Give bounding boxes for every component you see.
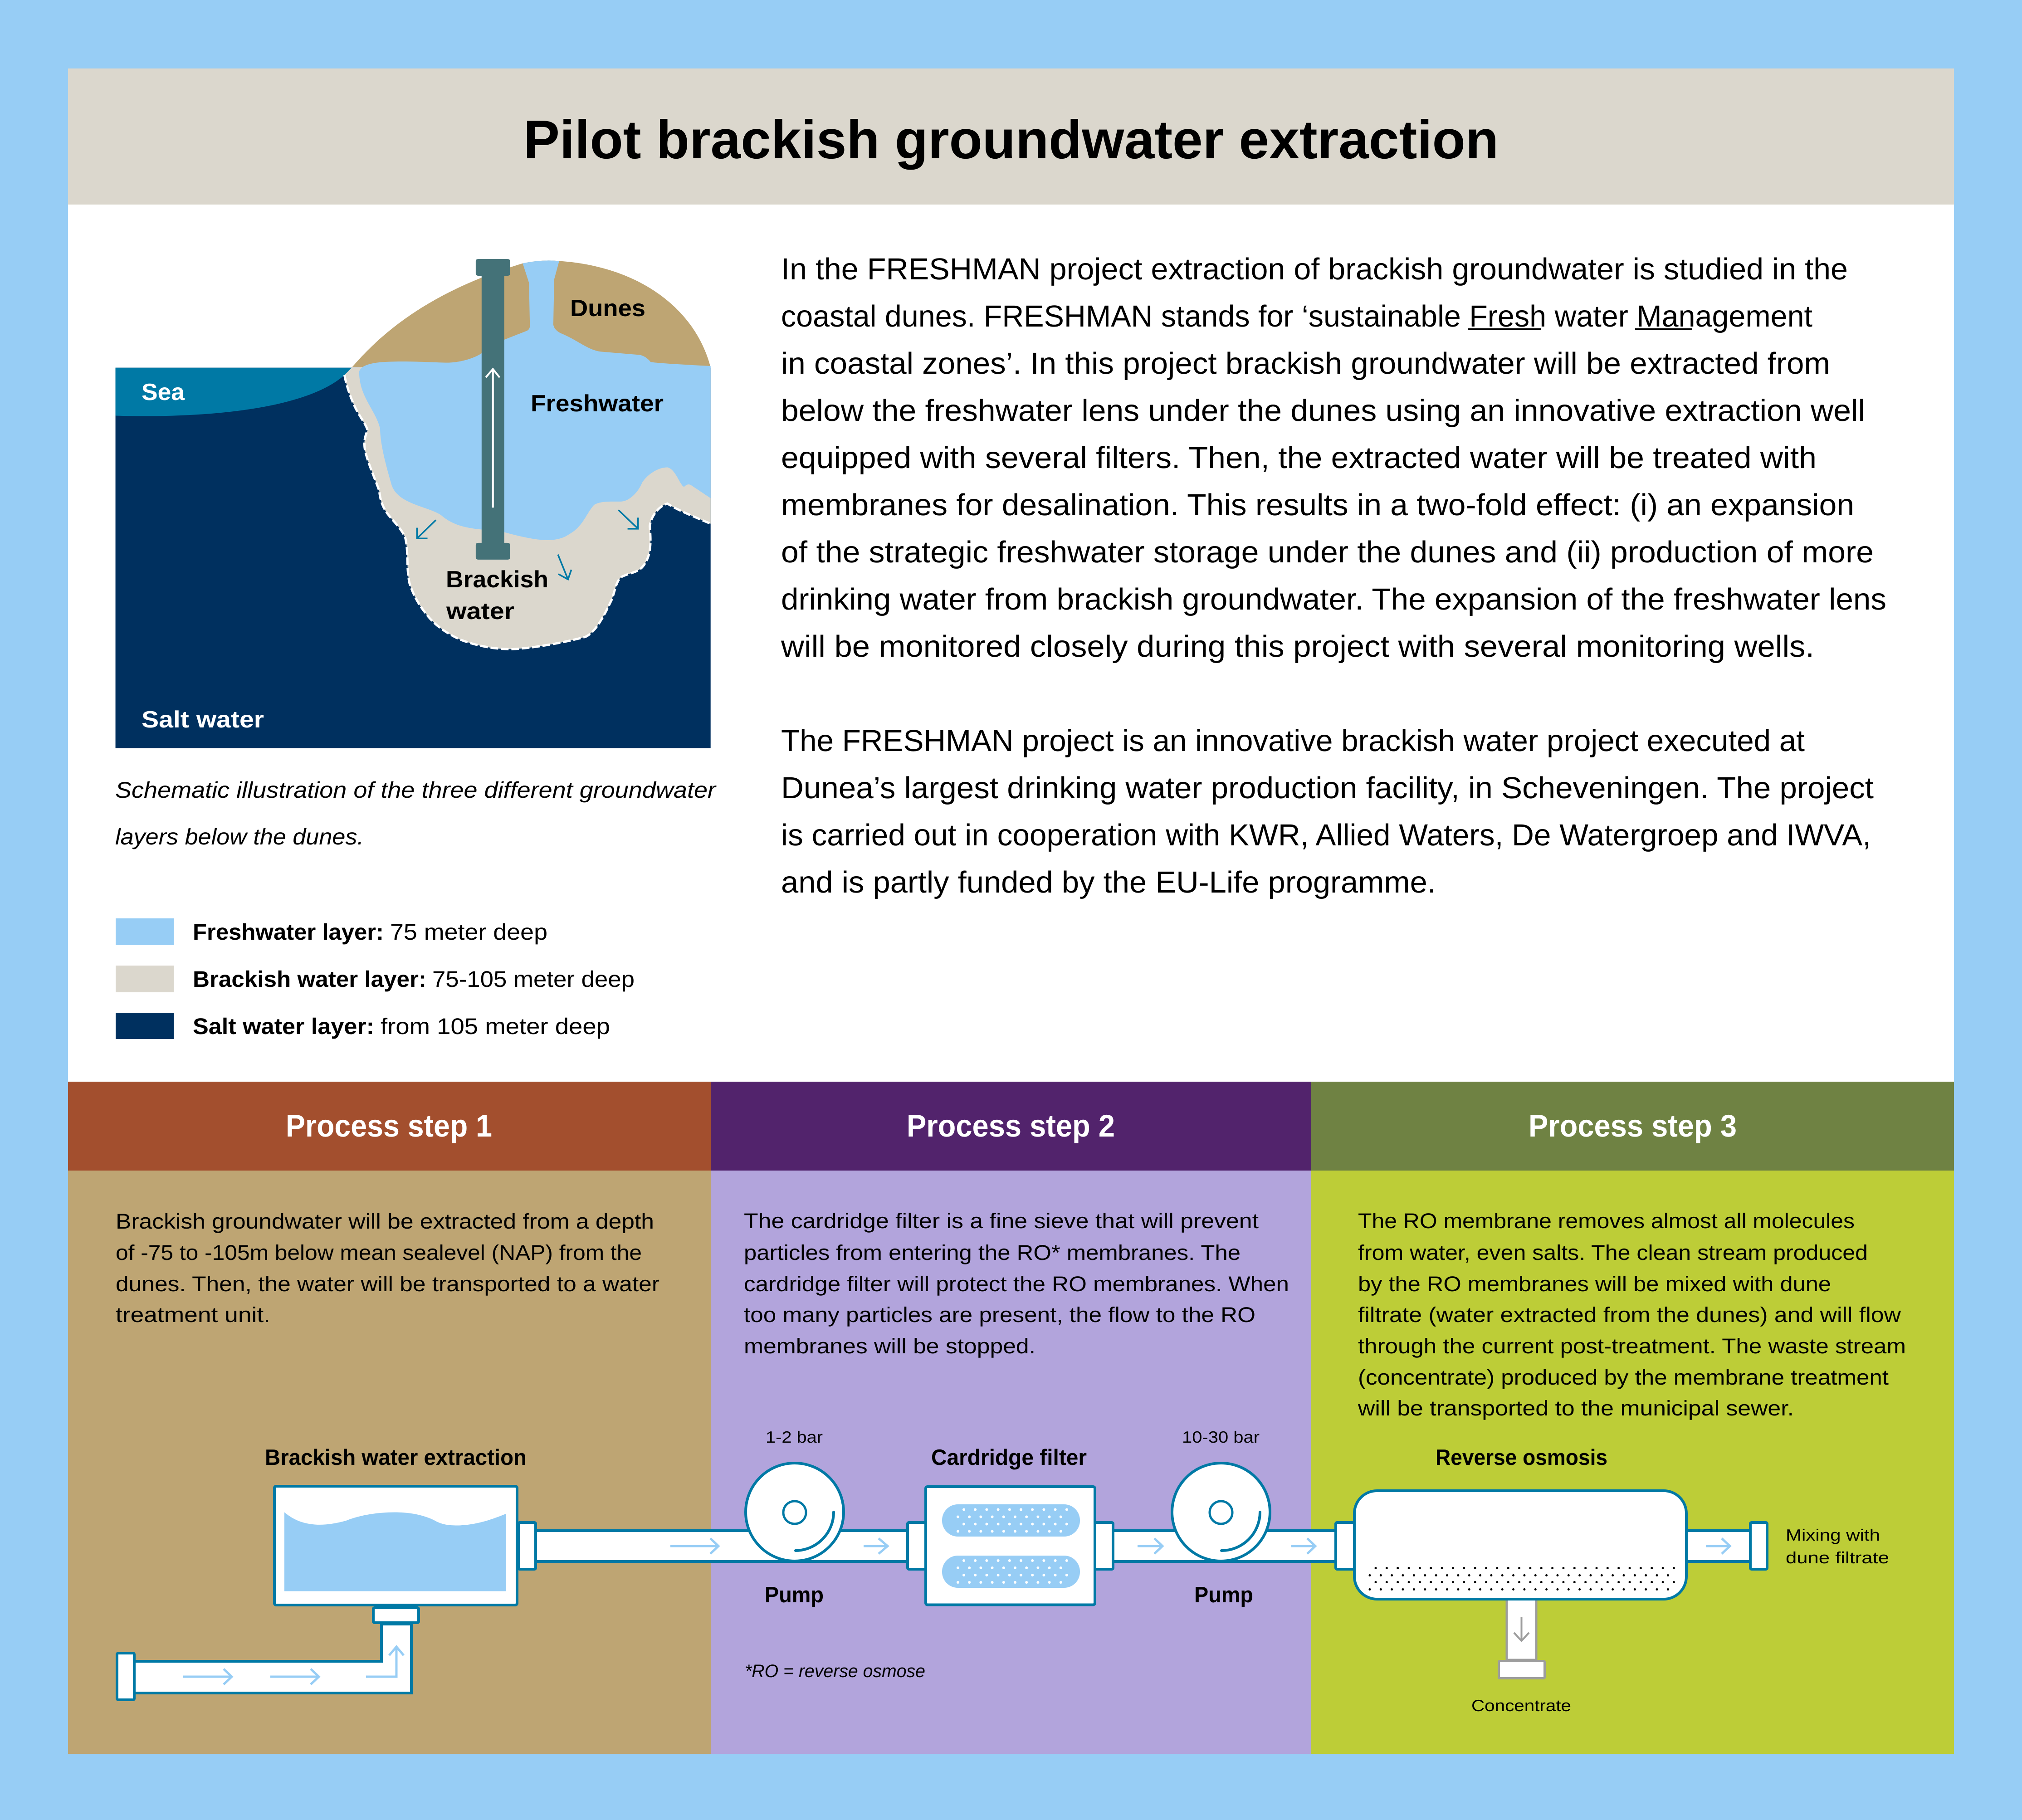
label: Salt water: Salt water — [142, 707, 264, 733]
text: process step 2 — [744, 1209, 1289, 1358]
label: Brackish water: Brackish — [446, 566, 548, 593]
arrow: well upward flow — [486, 369, 500, 507]
label: pump: Pump — [765, 1583, 824, 1607]
label: mixing with dune filtrate: dune filtrate — [1786, 1548, 1889, 1567]
label: mixing with dune filtrate — [1786, 1526, 1889, 1567]
label: Freshwater: Freshwater — [531, 390, 664, 417]
intro paragraph: of the strategic freshwater storage under the dunes and (ii) production of more — [781, 535, 1874, 569]
intro paragraph: membranes for desalination. This results in a two-fold effect: (i) an expansion — [781, 488, 1854, 522]
diagram: groundwater layers under the dunes — [116, 259, 711, 748]
text: process step 1: treatment unit. — [116, 1303, 270, 1327]
label: concentrate: Concentrate — [1471, 1696, 1571, 1715]
pressure 1-2 bar: 1-2 bar — [766, 1428, 823, 1446]
unit: reverse osmosis — [1336, 1445, 1889, 1715]
freshwater — [359, 260, 711, 540]
label: Brackish water — [446, 566, 548, 625]
legend item: salt water — [116, 1013, 610, 1039]
dunes — [352, 260, 711, 368]
text: process step 2: cardridge filter will protect the RO membranes. When — [744, 1272, 1289, 1296]
arrow: pipe to filter — [864, 1538, 888, 1554]
arrow: flow left — [417, 520, 436, 538]
vessel — [1354, 1491, 1686, 1599]
pump swoosh — [1221, 1512, 1260, 1551]
heading: process step 3: Process step 3 — [1529, 1108, 1737, 1143]
text: process step 1: dunes. Then, the water will be transported to a water — [116, 1272, 659, 1296]
label: Sea: Sea — [142, 379, 185, 405]
label: mixing with dune filtrate: Mixing with — [1786, 1526, 1880, 1544]
panel: process step 1 — [68, 1082, 711, 1754]
unit: pump 2 — [1172, 1428, 1270, 1607]
project paragraph: and is partly funded by the EU-Life programme. — [781, 865, 1436, 899]
brackish water layer — [344, 368, 711, 649]
footnote: RO: *RO = reverse osmose — [745, 1661, 925, 1681]
arrow: outlet — [1706, 1538, 1730, 1554]
intro paragraph — [781, 252, 1886, 664]
tank — [274, 1486, 517, 1605]
filter housing — [926, 1487, 1095, 1605]
arrow: filter to pump — [1138, 1538, 1162, 1554]
label: pump: Pump — [1194, 1583, 1253, 1607]
unit: brackish water extraction — [117, 1445, 718, 1700]
legend item: brackish water: Brackish water layer: — [193, 966, 426, 992]
arrow: flow down — [558, 555, 571, 580]
intro paragraph: equipped with several filters. Then, the extracted water will be treated with — [781, 441, 1817, 475]
pump rotor — [783, 1501, 806, 1524]
text: process step 1: Brackish groundwater will be extracted from a depth — [116, 1209, 654, 1233]
concentrate pipe — [1507, 1596, 1536, 1660]
dashed boundary brackish and salt — [344, 375, 711, 649]
arrow: inlet riser — [366, 1647, 404, 1677]
label: Dunes: Dunes — [570, 295, 645, 322]
intro paragraph: in coastal zones’. In this project brackish groundwater will be extracted from — [781, 346, 1830, 381]
text: process step 3: The RO membrane removes almost all molecules — [1358, 1209, 1855, 1233]
intro paragraph: will be monitored closely during this project with several monitoring wells. — [781, 629, 1814, 664]
legend — [116, 918, 635, 1039]
text: process step 3: by the RO membranes will be mixed with dune — [1358, 1272, 1831, 1296]
sea — [116, 368, 352, 416]
legend item: brackish water — [116, 966, 635, 992]
legend item: salt water: Salt water layer: — [193, 1014, 374, 1039]
text: process step 3: through the current post-treatment. The waste stream — [1358, 1334, 1906, 1358]
text: process step 3 — [1358, 1209, 1906, 1420]
label: Brackish water: water — [446, 598, 514, 625]
text: process step 2: membranes will be stopped. — [744, 1334, 1035, 1358]
text: process step 1: of -75 to -105m below mean sealevel (NAP) from the — [116, 1240, 642, 1264]
inlet flange — [1336, 1522, 1355, 1569]
pump swoosh — [796, 1512, 834, 1551]
pump body — [1172, 1463, 1270, 1561]
arrow: pump to reverse osmosis — [1291, 1538, 1315, 1554]
intro paragraph: below the freshwater lens under the dunes using an innovative extraction well — [781, 394, 1865, 428]
membrane dots — [1370, 1568, 1676, 1589]
caption — [115, 777, 717, 849]
arrow: outlet — [670, 1538, 718, 1554]
intro paragraph: In the FRESHMAN project extraction of brackish groundwater is studied in the — [781, 252, 1848, 286]
outlet flange — [1750, 1522, 1767, 1569]
title band — [68, 68, 1954, 205]
text: process step 3: from water, even salts. The clean stream produced — [1358, 1240, 1868, 1264]
caption: Schematic illustration of the three different groundwater — [115, 777, 717, 803]
inlet flange — [117, 1653, 134, 1700]
project paragraph — [781, 724, 1874, 899]
arrow: inlet 1 — [183, 1669, 232, 1684]
pump body — [746, 1463, 844, 1561]
legend item: freshwater: 75 meter deep — [390, 919, 547, 945]
pressure 10-30 bar: 10-30 bar — [1182, 1428, 1260, 1446]
left flange — [908, 1522, 926, 1569]
label: cardridge filter: Cardridge filter — [931, 1445, 1087, 1470]
text: process step 2: The cardridge filter is a fine sieve that will prevent — [744, 1209, 1259, 1233]
water in tank — [284, 1512, 506, 1591]
panel: process step 2 — [711, 1082, 1311, 1754]
project paragraph: The FRESHMAN project is an innovative brackish water project executed at — [781, 724, 1805, 758]
project paragraph: Dunea’s largest drinking water production facility, in Scheveningen. The project — [781, 771, 1874, 805]
pipes between process units — [537, 1531, 1749, 1561]
panel: process step 3 — [1311, 1082, 1954, 1754]
heading: process step 1: Process step 1 — [286, 1108, 492, 1143]
inlet pipe — [134, 1624, 411, 1693]
text: process step 3: will be transported to the municipal sewer. — [1358, 1396, 1794, 1420]
extraction well — [476, 259, 510, 560]
cartridge top — [942, 1504, 1080, 1537]
unit: cardridge filter — [908, 1445, 1113, 1605]
text: process step 1 — [116, 1209, 659, 1327]
intro paragraph: coastal dunes. FRESHMAN stands for ‘sustainable Fresh water Management — [781, 299, 1812, 333]
arrow: inlet 2 — [270, 1669, 319, 1684]
tank connector — [373, 1608, 419, 1623]
label: brackish water extraction: Brackish water extraction — [265, 1445, 527, 1470]
salt water layer — [116, 368, 711, 748]
intro paragraph: drinking water from brackish groundwater. The expansion of the freshwater lens — [781, 582, 1886, 616]
heading: process step 2: Process step 2 — [907, 1108, 1115, 1143]
right flange — [1095, 1522, 1113, 1569]
label: reverse osmosis: Reverse osmosis — [1436, 1445, 1607, 1470]
outlet flange — [518, 1522, 536, 1569]
caption: layers below the dunes. — [115, 824, 364, 849]
legend item: freshwater: Freshwater layer: — [193, 919, 384, 945]
unit: pump 1 — [746, 1428, 844, 1607]
cartridge bottom — [942, 1556, 1080, 1588]
arrow: flow right — [618, 510, 638, 529]
text: process step 2: particles from entering the RO* membranes. The — [744, 1240, 1241, 1264]
pump rotor — [1210, 1501, 1232, 1524]
legend item: salt water: from 105 meter deep — [381, 1014, 610, 1039]
text: process step 3: filtrate (water extracted from the dunes) and will flow — [1358, 1303, 1901, 1327]
arrow: concentrate — [1514, 1617, 1529, 1641]
text: process step 3: (concentrate) produced by the membrane treatment — [1358, 1365, 1889, 1389]
legend item: freshwater — [116, 918, 547, 945]
project paragraph: is carried out in cooperation with KWR, Allied Waters, De Watergroep and IWVA, — [781, 818, 1871, 852]
title: Pilot brackish groundwater extraction — [523, 109, 1499, 170]
concentrate flange — [1499, 1661, 1545, 1678]
text: process step 2: too many particles are present, the flow to the RO — [744, 1303, 1255, 1327]
legend item: brackish water: 75-105 meter deep — [432, 966, 635, 992]
